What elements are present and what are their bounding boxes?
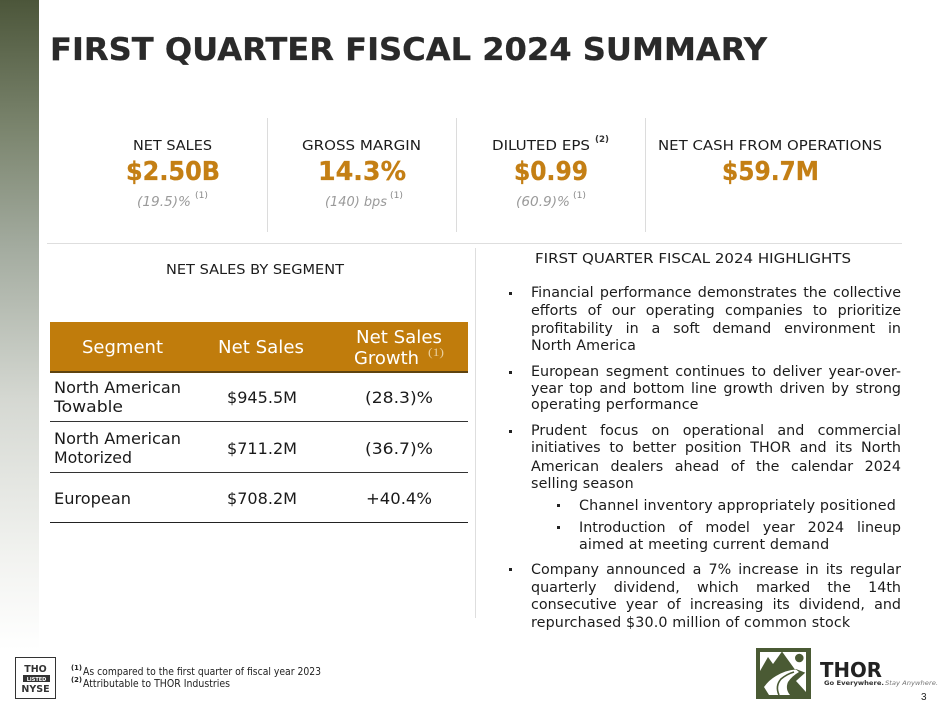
KPI: diluted EPS: DILUTED EPS: [492, 139, 590, 154]
footnotes: Attributable to THOR Industries: [83, 678, 230, 690]
row: North American Towable: North American: [54, 378, 181, 397]
bullet: prudent focus: Introduction of model year 2024 lineup: [579, 520, 901, 536]
bullet: dividend: Company announced a 7% increase in its regular: [531, 562, 901, 578]
icon: NYSE listed badge: [16, 658, 56, 698]
bullet: financial performance: North America: [531, 338, 636, 354]
KPI: gross margin: (1): [390, 191, 403, 201]
row: North American Motorized: Motorized: [54, 448, 132, 467]
icon: NYSE listed badge: NYSE: [21, 684, 50, 695]
row: North American Motorized: North American: [54, 429, 181, 448]
row: European: $708.2M: [227, 489, 297, 508]
KPI: diluted EPS: (1): [573, 191, 586, 201]
KPI: gross margin: (140) bps: [325, 194, 387, 210]
row: North American Motorized: [54, 429, 433, 467]
bullet: prudent focus: [531, 423, 901, 553]
row: North American Towable: $945.5M: [227, 388, 297, 407]
bullet: European segment: year top and bottom line growth driven by strong: [531, 381, 901, 397]
segment table: [50, 322, 468, 522]
row: North American Towable: Towable: [53, 397, 123, 416]
KPI: diluted EPS: (60.9)%: [516, 194, 570, 210]
KPI: net sales: $2.50B: [126, 157, 220, 187]
KPI: net cash from operations: $59.7M: [722, 157, 819, 187]
KPI: diluted EPS: (2): [595, 135, 609, 145]
bullet: financial performance: efforts of our operating companies to prioritize: [531, 303, 901, 319]
bullet: prudent focus: Channel inventory appropriately positioned: [579, 498, 896, 514]
row: European: European: [54, 489, 131, 508]
KPI: diluted EPS: [492, 135, 609, 210]
table header: Net Sales: [218, 338, 304, 358]
table header: Net Sales: [356, 328, 442, 348]
table header: [50, 322, 468, 373]
KPI: net sales: (19.5)%: [137, 194, 191, 210]
title: FIRST QUARTER FISCAL 2024 SUMMARY: [50, 32, 768, 68]
table header: Growth: [354, 349, 419, 369]
bullet: dividend: [531, 562, 901, 631]
row: North American Towable: [53, 378, 433, 416]
row: North American Motorized: $711.2M: [227, 439, 297, 458]
table header: Segment: [82, 338, 163, 358]
KPI: gross margin: GROSS MARGIN: [302, 139, 421, 154]
bullet: dividend: quarterly dividend, which marked the 14th: [531, 580, 901, 596]
table header: (1): [428, 345, 444, 359]
KPI: net sales: [126, 139, 220, 210]
icon: NYSE listed badge: THO: [24, 664, 47, 675]
icon: THOR logo mark: [756, 648, 811, 699]
THOR wordmark and tagline: Go Everywhere.: [824, 679, 884, 687]
KPI: net sales: NET SALES: [133, 139, 212, 154]
bullet: dividend: repurchased $30.0 million of common stock: [531, 615, 850, 631]
heading: highlights: FIRST QUARTER FISCAL 2024 HIGHLIGHTS: [535, 252, 851, 267]
footnotes: (2): [71, 676, 82, 684]
heading: net sales by segment: NET SALES BY SEGMENT: [166, 263, 344, 278]
footnotes: (1): [71, 664, 82, 672]
bullet: European segment: European segment continues to deliver year-over-: [531, 364, 901, 380]
row: European: [54, 489, 432, 508]
THOR wordmark and tagline: Stay Anywhere.: [885, 679, 938, 687]
THOR wordmark and tagline: [820, 658, 938, 687]
page number: 3: [921, 692, 927, 703]
bullet: prudent focus: initiatives to better position THOR and its North: [531, 440, 901, 456]
bullet: financial performance: [531, 285, 901, 354]
footnotes: As compared to the first quarter of fiscal year 2023: [83, 666, 321, 678]
THOR wordmark and tagline: THOR: [820, 658, 882, 682]
KPI: gross margin: 14.3%: [318, 157, 406, 187]
bullet: European segment: operating performance: [531, 397, 699, 413]
bullet: prudent focus: selling season: [531, 476, 634, 492]
bullet: financial performance: Financial performance demonstrates the collective: [531, 285, 901, 301]
KPI: net sales: (1): [195, 191, 208, 201]
row: North American Motorized: (36.7)%: [365, 439, 433, 458]
bullet: prudent focus: American dealers ahead of the calendar 2024: [531, 459, 901, 475]
icon: NYSE listed badge: LISTED: [27, 677, 46, 683]
KPI: net cash from operations: NET CASH FROM OPERATIONS: [658, 139, 882, 154]
KPI: net cash from operations: [658, 139, 882, 187]
footnotes: [71, 664, 321, 690]
row: North American Towable: (28.3)%: [365, 388, 433, 407]
sidebar gradient band: [0, 0, 39, 650]
bullet: financial performance: profitability in a soft demand environment in: [531, 321, 901, 337]
KPI: gross margin: [302, 139, 421, 210]
bullet: prudent focus: aimed at meeting current demand: [579, 537, 829, 553]
highlights bullet list: [531, 285, 901, 631]
bullet: prudent focus: Prudent focus on operational and commercial: [531, 423, 901, 439]
bullet: European segment: [531, 364, 901, 413]
row: European: +40.4%: [366, 489, 432, 508]
bullet: dividend: consecutive year of increasing its dividend, and: [531, 597, 901, 613]
KPI: diluted EPS: $0.99: [514, 157, 588, 187]
